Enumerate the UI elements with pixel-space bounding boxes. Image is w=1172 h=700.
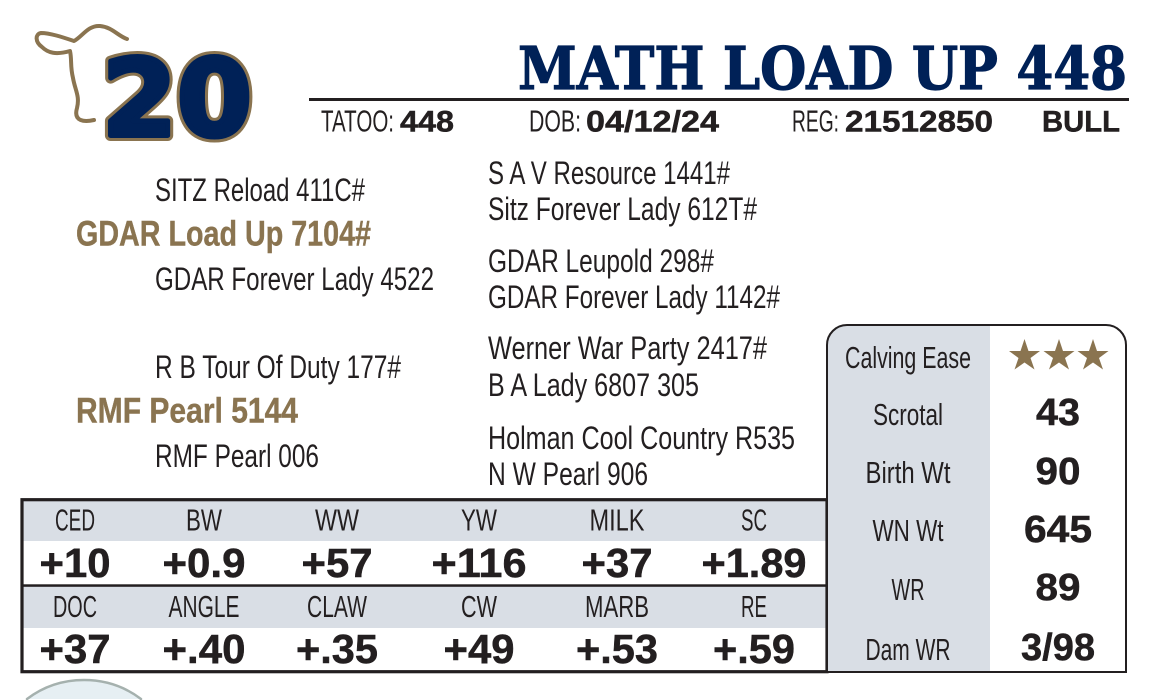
performance labels [845,340,971,667]
pedigree: grandparents [488,155,795,492]
EPD row two labels: MARB [585,589,649,624]
EPD row one values: +10 [40,540,110,586]
EPD row two values [40,626,795,672]
header rule [309,98,1129,101]
EPD row one values: +57 [302,540,372,586]
pedigree: grandparents: Holman Cool Country R535 [488,420,795,456]
EPD row one labels: YW [461,503,498,538]
pedigree: grandparents: N W Pearl 906 [488,456,648,492]
performance values: 43 [1036,392,1080,434]
pedigree: sire side: GDAR Load Up 7104# [76,214,371,254]
pedigree: grandparents: Sitz Forever Lady 612T# [488,191,757,227]
sex: BULL [1042,106,1120,138]
pedigree: dam side: RMF Pearl 006 [155,438,319,474]
date of birth: DOB: [529,104,581,138]
registration: REG: [792,104,839,138]
icon: calving ease stars [1009,339,1108,370]
performance values: 90 [1036,451,1080,493]
performance labels: Scrotal [873,397,943,432]
EPD row two values: +.53 [576,626,658,672]
pedigree: sire side [76,172,434,297]
date of birth: 04/12/24 [586,106,719,138]
EPD row two values: +37 [40,626,110,672]
tattoo: 448 [400,106,454,138]
pedigree: dam side [76,349,401,474]
performance values: 3/98 [1021,627,1095,669]
date of birth [529,104,719,138]
performance values: 89 [1036,567,1080,609]
panel: performance data [827,325,1126,672]
pedigree: grandparents: Werner War Party 2417# [488,330,767,366]
pedigree: grandparents: GDAR Forever Lady 1142# [488,279,780,315]
registration [792,104,993,138]
EPD row two labels: CLAW [307,589,367,624]
performance labels: Birth Wt [866,455,951,490]
EPD row one values [40,540,806,586]
EPD row one values: +1.89 [702,540,806,586]
EPD row two labels: ANGLE [168,589,240,624]
lot number: 20 [102,38,252,160]
lot number: 20 [102,38,252,160]
registration: 21512850 [845,106,993,138]
icon: partial seal at bottom edge [27,680,141,699]
tattoo: TATOO: [321,104,394,138]
pedigree: grandparents: GDAR Leupold 298# [488,243,714,279]
EPD row one values: +0.9 [162,540,246,586]
EPD row two labels [53,589,767,624]
EPD row one labels: BW [186,503,223,538]
pedigree: grandparents: B A Lady 6807 305 [488,367,699,403]
performance values [1021,392,1095,669]
pedigree: grandparents: S A V Resource 1441# [488,155,730,191]
pedigree: sire side: SITZ Reload 411C# [155,172,365,208]
icon: cow head outline [37,26,127,121]
pedigree: dam side: RMF Pearl 5144 [76,392,298,430]
pedigree: dam side: R B Tour Of Duty 177# [155,349,401,385]
EPD row one labels [55,503,767,538]
EPD row one values: +116 [432,540,526,586]
EPD row two labels: CW [461,589,498,624]
EPD row two values: +.35 [296,626,378,672]
EPD row two values: +.40 [162,626,246,672]
performance values: 645 [1024,509,1092,551]
EPD row one labels: WW [315,503,360,538]
pedigree: sire side: GDAR Forever Lady 4522 [155,261,434,297]
performance labels: WN Wt [872,513,944,548]
EPD row two labels: RE [741,589,767,624]
EPD row two values: +.59 [713,626,795,672]
EPD row two values: +49 [444,626,514,672]
EPD row one labels: SC [741,503,767,538]
EPD row one values: +37 [582,540,652,586]
EPD row one labels: CED [55,503,95,538]
EPD row two labels: DOC [53,589,97,624]
panel: EPD table [22,500,827,672]
performance labels: Dam WR [866,632,950,667]
EPD row one labels: MILK [590,503,645,538]
performance labels: WR [892,572,924,607]
performance labels: Calving Ease [845,340,971,375]
